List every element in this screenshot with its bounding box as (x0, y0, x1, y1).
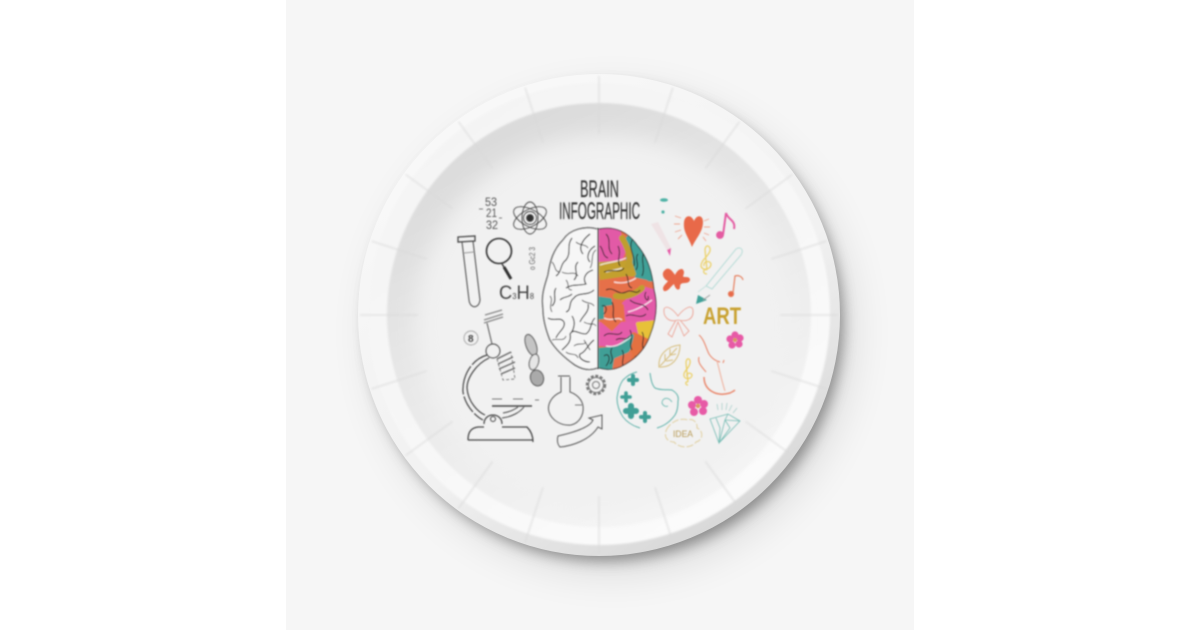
title (559, 176, 640, 225)
backdrop panel (286, 0, 914, 630)
microscope base (484, 415, 502, 424)
microscope eyepiece (484, 310, 503, 323)
palette paint dabs (622, 376, 649, 421)
paper plate (358, 74, 840, 556)
plate outer lip (358, 74, 840, 556)
plate drop shadow (367, 85, 850, 570)
icon: test tube (458, 236, 480, 307)
title line one: BRAIN (580, 176, 619, 203)
icon: atom (510, 202, 550, 234)
icon: coin (464, 331, 478, 345)
right hemisphere colour lobes (596, 230, 657, 372)
brain: central fissure (597, 228, 599, 369)
brain: right outline (599, 228, 656, 369)
microscope stage (492, 399, 539, 400)
icon: leaf (659, 345, 680, 367)
icon: idea cloud (665, 419, 702, 447)
plate rim band (368, 83, 830, 545)
icon: bow (664, 307, 693, 337)
icon: paint palette (617, 372, 678, 428)
right hemisphere white streaks (600, 258, 652, 347)
icon: orange music note (728, 276, 743, 297)
icon: diamond (710, 403, 740, 443)
printed artwork: INFOGRAPHIC (559, 198, 640, 225)
number sequence: 21 (486, 208, 497, 220)
formula: C3H8: C3H8 (499, 283, 535, 304)
rim creases (360, 76, 838, 554)
icon: heart (674, 216, 710, 247)
icon: faded paintbrush (651, 222, 672, 256)
printed artwork (458, 176, 744, 447)
right hemisphere fissures (600, 234, 648, 368)
icon: violin sketch (699, 335, 735, 394)
vertical formula: o Gc2 3 (528, 247, 537, 270)
right hemisphere mustard stripes (616, 238, 642, 297)
art label: ART (703, 303, 741, 330)
icon: small treble clef (684, 359, 692, 385)
icon: coin: 8 (468, 334, 474, 345)
number sequence: 53 (485, 197, 497, 209)
plate inner well (387, 103, 811, 527)
icon: yellow treble clef (701, 246, 711, 274)
icon: orange splat (663, 269, 690, 291)
icon: pink flower lower (688, 396, 708, 416)
microscope arm (463, 355, 487, 420)
number sequence (479, 197, 502, 232)
right hemisphere base (598, 230, 654, 349)
icon: pink music note (717, 213, 734, 238)
brain: right hemisphere (598, 228, 657, 370)
icon: magnifying glass (486, 238, 512, 279)
icon: pink flower upper (726, 331, 744, 349)
arrow: curved (557, 415, 602, 447)
icon: microscope (463, 310, 539, 442)
brain: left hemisphere (542, 228, 597, 370)
number sequence: 32 (486, 220, 498, 232)
brain (542, 225, 660, 373)
icon: gear (587, 376, 605, 394)
icon: idea cloud: IDEA (673, 429, 693, 439)
icon: paint brush (696, 248, 742, 304)
microscope objective (497, 352, 515, 380)
icon: round flask (548, 376, 583, 425)
teal paint marks (660, 198, 668, 214)
icon: DNA helix (523, 333, 545, 387)
